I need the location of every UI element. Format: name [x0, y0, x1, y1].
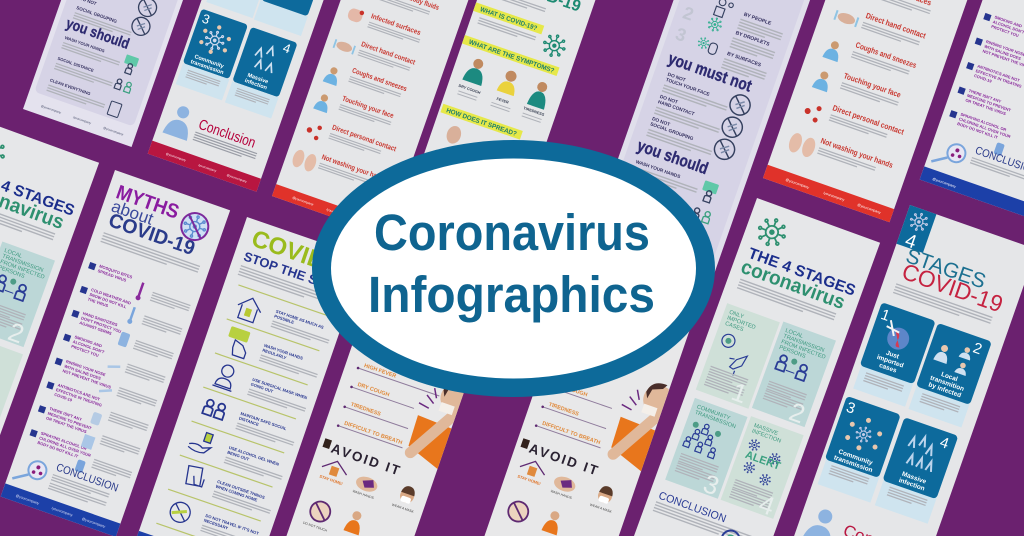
panel: transmission causes card with red footer, top: @yourcompany	[292, 195, 314, 207]
panel: 4 stages COVID-19 card, top left crop: Community	[193, 54, 225, 70]
panel: transmission causes card with red footer, top right: Coughs and sneezes	[854, 40, 918, 70]
stage 1: imported	[876, 354, 904, 370]
stage 4: 4	[938, 434, 951, 453]
heading: avoid it: AVOID IT	[329, 441, 404, 479]
panel: lavender precautions card, top left: SOCIAL DISTANCE	[57, 56, 95, 73]
stage 3: TRANSMISSION	[694, 410, 737, 430]
stage 2: transmition	[929, 375, 965, 393]
prevention list: USE SURGICAL MASK WHEN	[252, 377, 308, 400]
myths list: RINSING YOUR NOSE	[65, 359, 107, 377]
symptoms list: HIGH FEVER	[363, 363, 397, 380]
stage 2: by infected	[927, 381, 962, 399]
tab: blue number tab: 4	[902, 230, 920, 254]
heading: stages covid-19: STAGES	[903, 244, 989, 293]
myths list: PROTECT YOU	[71, 344, 100, 358]
stage 2	[751, 321, 836, 431]
symptoms list: DIFFICULT TO BREATH	[343, 421, 403, 446]
footer: @yourcompany	[15, 494, 40, 506]
myths list: THE VIRUS	[87, 296, 109, 308]
panel: transmission causes card with red footer, top	[272, 0, 484, 236]
myths list: COVID-19	[54, 392, 74, 403]
panel: myths card, top right crop: COVID-19	[973, 73, 993, 84]
stage 1: CASES	[724, 321, 744, 333]
icon: green virus	[754, 214, 790, 250]
stage 1	[695, 303, 780, 412]
panel: lavender precautions card, top centre right: DO NOT	[667, 72, 686, 84]
yellow heading: what is covid: WHAT IS COVID-19?	[479, 6, 538, 32]
panel: what is COVID-19 card with yellow headings: FEVER	[496, 97, 509, 105]
stage 4	[874, 417, 958, 524]
heading: myths about covid-19	[104, 181, 207, 260]
panel: 4 stages COVID-19 card, top left crop: 3	[200, 11, 212, 27]
panel: transmission causes card with red footer, top right: Touching your face	[842, 71, 902, 100]
stage 1: 1	[728, 376, 751, 409]
panel: lavender precautions card, top centre right: SOCIAL GROUPING	[649, 121, 694, 142]
stage 2: TRANSMISSION	[782, 334, 825, 354]
myths list: BODY DO NOT KILL IT	[37, 440, 79, 459]
panel: symptoms and avoid it card, left	[286, 345, 464, 536]
stage 1	[852, 302, 936, 407]
panel: myths card, top right crop: THERE ISN'T ANY	[968, 88, 1002, 104]
panel: lavender precautions card, top centre right: WASH YOUR HANDS	[635, 159, 681, 179]
stage 2: 2	[971, 339, 984, 358]
panel: transmission causes card with red footer, top right: Direct personal contact	[831, 103, 905, 137]
icon: crossed out virus	[178, 209, 212, 244]
stage 4: MASSIVE	[753, 423, 779, 437]
myths list: HAND SANITIZERS	[82, 311, 118, 327]
title: Infographics	[368, 266, 655, 323]
prevention list: WASH YOUR HANDS	[263, 343, 304, 361]
panel: lavender precautions card, top centre right: BY SURFACES	[726, 51, 762, 69]
panel: the 4 stages coronavirus card, left crop	[0, 118, 99, 536]
panel: myths card, top right crop	[920, 0, 1024, 220]
avoid it icons: WEAR A MASK	[391, 503, 415, 514]
stage 1: ONLY	[728, 310, 745, 320]
prevention list: USE ALCOHOL GEL WHEN	[228, 445, 280, 467]
conclusion with doctor icon	[801, 505, 928, 536]
panel: myths about COVID-19 card	[1, 170, 230, 536]
prevention list: REGULARLY	[262, 347, 287, 360]
myths list: ALCOHOL DON'T	[72, 339, 106, 355]
myths list: COLD WEATHER AND	[90, 287, 132, 306]
stage 1: IMPORTED	[726, 315, 756, 331]
panel: 4 stages COVID-19 card, top left crop: Conclusion	[196, 117, 258, 152]
panel: transmission causes card with red footer, top right: /yourcompany	[823, 191, 845, 202]
conclusion	[650, 490, 756, 536]
tab: blue number tab	[895, 205, 936, 257]
myths list: EFFECTIVE IN TREATING	[55, 387, 103, 408]
panel: transmission causes card with red footer, top: /yourcompany	[326, 207, 346, 218]
panel: 4 stages COVID-19 card, top left crop: transmission	[190, 59, 225, 76]
panel: transmission causes card with red footer, top right	[763, 0, 975, 222]
panel: the 4 stages coronavirus card	[620, 198, 880, 536]
prevention list: GOING OUT	[250, 381, 274, 394]
stage 2: Local	[940, 371, 959, 383]
panel: symptoms and avoid it card, right	[484, 331, 690, 536]
title oval	[312, 140, 715, 397]
symptoms list: DIFFICULT TO BREATH	[541, 421, 601, 446]
stage 4: Massive	[901, 471, 927, 486]
icons: prevention	[164, 294, 265, 526]
stage 3: transmission	[833, 454, 873, 474]
heading: myths about covid-19: MYTHS	[113, 181, 182, 224]
illustration: coughing person	[608, 383, 669, 472]
stage 4: infection	[898, 477, 926, 493]
conclusion: CONCLUSION	[54, 462, 120, 495]
panel: transmission causes card with red footer, top: Touching your face	[341, 94, 395, 120]
symptoms list	[337, 361, 442, 455]
myths list: CHLORINE ALL OVER YOUR	[39, 435, 92, 458]
panel: transmission causes card with red footer, top right: Direct hand contact	[865, 11, 927, 41]
stage 3: Community	[837, 448, 874, 467]
avoid it icons: WASH HANDS	[352, 489, 375, 500]
prevention list	[203, 309, 331, 536]
symptoms list: TIREDNESS	[548, 402, 580, 418]
stage 4: ALERT	[744, 449, 782, 473]
panel: transmission causes card with red footer, top right: @yourcompany	[785, 178, 810, 190]
myths list: SPRAYING ALCOHOL OR	[40, 430, 87, 451]
panel: myths card, top right crop: @yourcompany	[932, 177, 957, 189]
panel: what is COVID-19 card with yellow headings: DRY COUGH	[458, 84, 481, 95]
stage 3: 3	[844, 399, 857, 418]
panel: lavender precautions card, top centre right: 2	[680, 3, 696, 25]
heading: stop the spread: STOP THE SPREAD	[242, 249, 362, 303]
panel: the 4 stages coronavirus card, left crop: LOCAL	[3, 248, 23, 260]
avoid it icons	[302, 457, 422, 536]
panel: 4 stages COVID-19 card, top left crop: infection	[244, 78, 268, 92]
heading: avoid it: AVOID IT	[527, 441, 602, 479]
panel: lavender precautions card, top left: /yourcompany	[73, 115, 92, 125]
conclusion: CONCLUSION	[657, 490, 728, 525]
symptoms list: DRY COUGH	[555, 382, 588, 398]
prevention list: WHEN COMING HOME	[215, 484, 258, 503]
symptoms list: DRY COUGH	[357, 382, 390, 398]
panel: myths card, top right crop: MEDICINE TO PREVENT	[966, 93, 1012, 113]
panel: what is COVID-19 card with yellow headings	[405, 0, 596, 244]
myths list: OR TREAT THE VIRUS	[45, 415, 88, 434]
panel: 4 stages COVID-19 card, top left crop: 4	[281, 40, 293, 56]
panel: lavender precautions card, top centre right: BY DROPLETS	[735, 30, 771, 48]
heading: the 4 stages coronavirus: THE 4 STAGES	[746, 245, 858, 300]
yellow heading: spread: HOW DOES IT SPREAD?	[445, 107, 517, 138]
panel: 4 stages COVID-19 card, top left crop: Massive	[246, 73, 269, 85]
panel: lavender precautions card, top centre right: 3	[673, 24, 689, 46]
footer: /yourcompany	[51, 506, 73, 517]
panel: 4 stages COVID-19 card, top left crop: @yourcompany	[165, 152, 187, 163]
title: Coronavirus	[374, 204, 650, 261]
myths list: THERE ISN'T ANY	[49, 406, 83, 422]
panel: lavender precautions card, top centre right: DO NOT	[659, 94, 679, 106]
avoid it icons: WASH HANDS	[550, 489, 573, 500]
panel: lavender precautions card, top left: SOCIAL GROUPING	[76, 5, 118, 24]
panel: lavender precautions card, top left: you should	[64, 15, 132, 53]
heading: the 4 stages coronavirus: coronavirus	[738, 256, 848, 314]
avoid it icons: STAY HOME!	[319, 474, 343, 486]
heading: stop the spread: COVID-19	[248, 225, 362, 287]
panel: the 4 stages coronavirus card, left crop: 2	[4, 316, 28, 349]
panel: transmission causes card with red footer, top: Coughs and sneezes	[351, 66, 408, 93]
heading: myths about covid-19: about	[109, 197, 156, 229]
stage 3: COMMUNITY	[696, 404, 731, 422]
panel: transmission causes card with red footer, top: Direct personal contact	[331, 123, 398, 154]
panel: lavender precautions card, top left: @yourcompany	[103, 126, 124, 137]
panel: myths card, top right crop: EFFECTIVE IN TREATING	[975, 68, 1022, 89]
panel: lavender precautions card, top centre right: you must not	[666, 49, 755, 96]
myths list: ANTIBIOTICS ARE NOT	[57, 382, 101, 402]
myths list: SPREAD VIRUS	[97, 268, 127, 283]
footer	[1, 483, 120, 536]
panel: 4 stages COVID-19 card, top left crop	[148, 0, 365, 192]
stage 4: 4	[755, 488, 779, 521]
panel: 4 stages COVID-19 card, top left crop: /yourcompany	[198, 163, 217, 173]
footer: @yourcompany	[81, 517, 106, 529]
panel: myths card, top right crop: ANTIBIOTICS ARE NOT	[977, 63, 1021, 83]
yellow heading: symptoms: WHAT ARE THE SYMPTOMS?	[468, 39, 555, 75]
stage 2: FROM INFECTED	[780, 339, 826, 361]
prevention list: DISTANCE	[238, 416, 260, 427]
prevention list: POSSIBLE	[274, 313, 295, 325]
panel: myths card, top right crop: CHLORINE ALL OVER YOUR	[958, 116, 1011, 139]
heading: stages covid-19: COVID-19	[899, 258, 1006, 317]
heading: stop the spread	[242, 225, 371, 303]
panel: lavender precautions card, top left: WASH YOUR HANDS	[64, 35, 106, 54]
stage 3	[816, 396, 901, 503]
panel: transmission causes card with red footer, top right: @yourcompany	[857, 203, 882, 215]
panel: the 4 stages coronavirus card, left crop: FROM INFECTED	[0, 259, 45, 281]
myths list: SNOW DO NOT KILL	[89, 292, 128, 310]
conclusion	[12, 449, 120, 512]
avoid it icons: DO NOT TOUCH	[302, 521, 328, 533]
prevention list: MAINTAIN SAFE SOCIAL	[240, 411, 288, 431]
myths list: NOT PREVENT THE VIRUS	[62, 368, 112, 390]
panel: myths card, top right crop: OR TREAT THE VIRUS	[965, 97, 1007, 116]
panel: the 4 stages coronavirus card, left crop: TRANSMISSION	[1, 254, 44, 274]
prevention list: CLEAN OUTSIDE THINGS	[217, 479, 266, 500]
panel: lavender precautions card, top centre right: BY PEOPLE	[743, 12, 773, 27]
panel: lavender precautions card, top centre right: TOUCH YOUR FACE	[665, 77, 711, 98]
panel: myths card, top right crop: SPRAYING ALCOHOL OR	[960, 112, 1007, 132]
panel: lavender precautions card, top left	[23, 0, 231, 147]
stage 3	[664, 398, 748, 502]
illustration: coughing person	[404, 388, 464, 469]
stage 2: 2	[785, 396, 809, 429]
panel: lavender precautions card, top centre right: you should	[635, 136, 711, 178]
prevention list: BEING OUT	[227, 450, 250, 462]
avoid it icons: WEAR A MASK	[589, 503, 613, 514]
panel: transmission causes card with red footer, top: Infected surfaces	[370, 11, 422, 37]
panel: transmission causes card with red footer, top: Direct hand contact	[360, 39, 417, 67]
stage 4: INFECTION	[751, 429, 782, 445]
myths list: MEDICINE TO PREVENT	[47, 411, 93, 431]
stage 2: PERSONS	[778, 345, 807, 360]
icon: doctor	[162, 102, 197, 141]
avoid it icons: STAY HOME!	[517, 474, 541, 486]
title	[368, 204, 655, 323]
stage 1: Just	[885, 350, 901, 361]
panel: what is COVID-19 card with yellow headings: TIREDNESS	[523, 106, 545, 117]
panel: lavender precautions card, top centre right	[589, 0, 818, 284]
panel: myths card, top right crop: SMOKING AND	[994, 14, 1023, 29]
avoid it icons	[503, 457, 620, 536]
panel: transmission causes card with red footer, top: Not washing your hands	[321, 152, 388, 183]
myths list: DON'T PROTECT YOU	[80, 315, 122, 334]
panel: lavender precautions card, top centre right: HAND CONTACT	[657, 99, 695, 118]
panel: lavender precautions card, top left: @yourcompany	[40, 104, 62, 115]
myths list: WITH SALINE DOES	[64, 363, 102, 381]
panel: 4 stages COVID-19 card, top left crop: @yourcompany	[226, 173, 248, 184]
stage 1: 1	[879, 306, 892, 325]
symptoms list	[535, 380, 616, 449]
stage 4	[719, 416, 804, 523]
myths list: SMOKING AND	[74, 334, 103, 348]
panel: COVID-19 stop the spread card	[134, 217, 372, 536]
myths list: MOSQUITO BITES	[99, 263, 133, 280]
stage 2: LOCAL	[784, 328, 804, 340]
prevention list: NECESSARY	[203, 518, 229, 531]
symptoms list: TIREDNESS	[350, 402, 382, 418]
stage 2	[908, 323, 992, 428]
panel: myths card, top right crop: BODY DO NOT KILL IT	[957, 121, 999, 140]
panel: lavender precautions card, top left: CLEAN EVERYTHING	[49, 77, 91, 96]
heading: myths about covid-19: COVID-19	[106, 210, 198, 260]
panel: lavender precautions card, top centre right: DO NOT	[651, 116, 671, 128]
panel: myths card, top right crop: WITH SALINE DOES	[984, 44, 1022, 61]
stage 1: cases	[878, 362, 898, 375]
prevention list: STAY HOME AS MUCH AS	[275, 309, 325, 330]
prevention list: DO NOT TRAVEL IF IT'S NOT	[205, 513, 260, 536]
myths list	[23, 260, 194, 489]
myths list: AGAINST GERMS	[79, 320, 113, 336]
panel: 4 stages COVID-19 card	[784, 205, 1024, 536]
panel: myths card, top right crop: PROTECT YOU	[991, 24, 1020, 38]
panel: transmission causes card with red footer, top right: Not washing your hands	[819, 136, 895, 170]
stage 3: 3	[699, 468, 723, 501]
